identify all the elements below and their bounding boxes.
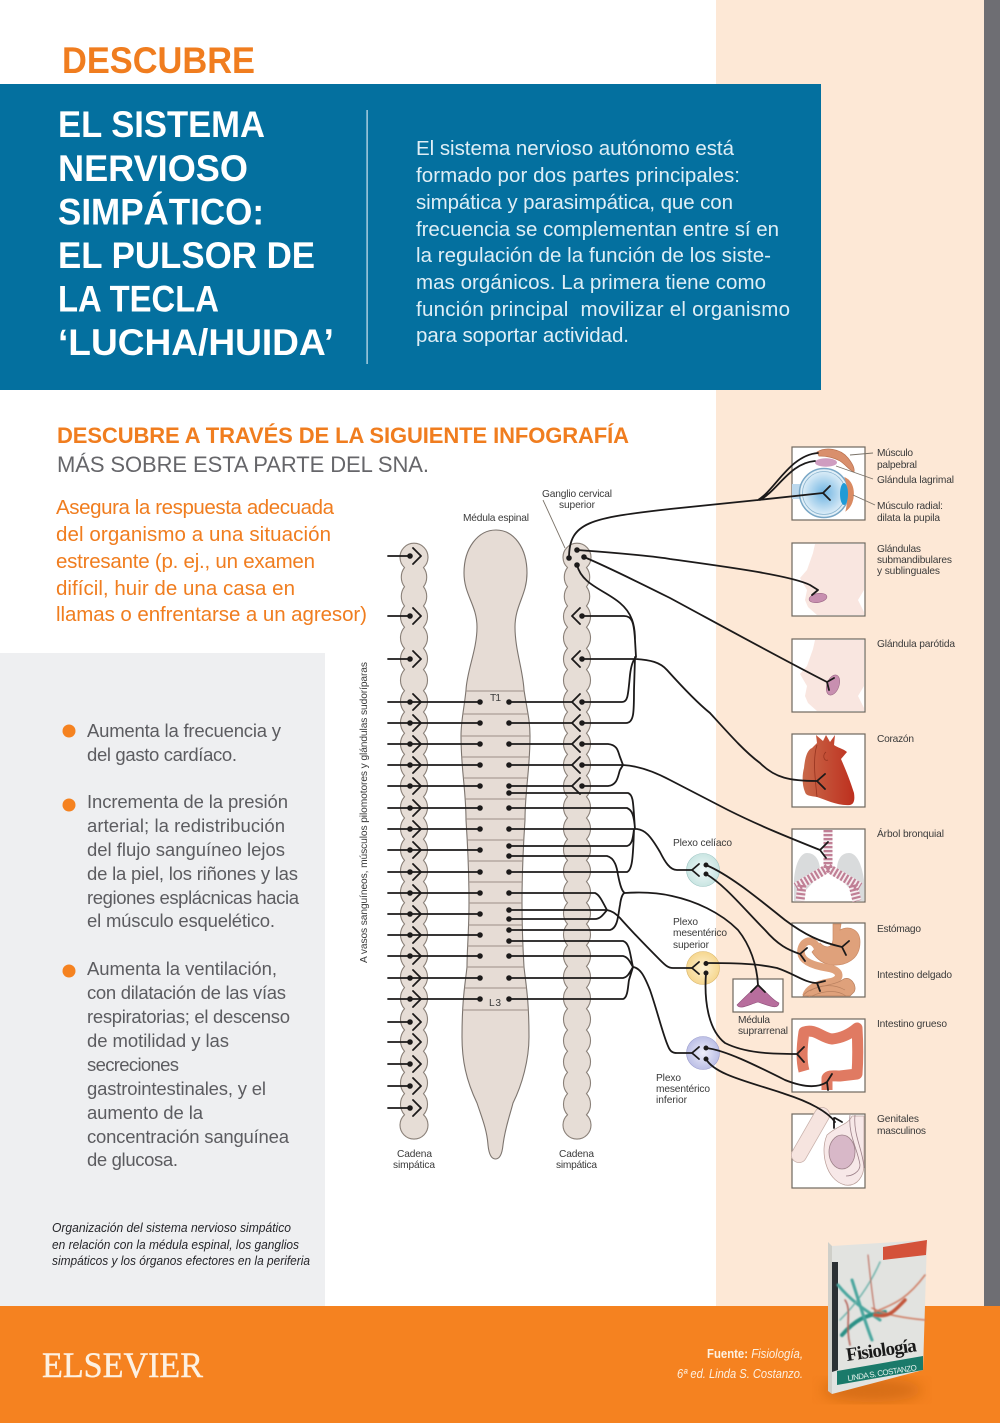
diagram labels: Plexo celíaco: [673, 838, 732, 849]
bullet: ventilation: de glucosa.: [87, 1149, 178, 1170]
diagram labels: superior: [673, 940, 710, 951]
diagram labels: Médula espinal: [463, 513, 529, 524]
submandibular: [577, 550, 818, 595]
diagram labels: Glándula parótida: [877, 639, 955, 650]
bullet: ventilation: de motilidad y las: [87, 1030, 229, 1051]
bullet: ventilation: aumento de la: [87, 1102, 204, 1123]
diagram labels: Cadena: [559, 1149, 594, 1160]
diagram labels: Músculo radial:: [877, 501, 943, 512]
source credit: Fuente: Fisiología,: [707, 1347, 803, 1361]
diagram labels: Médula: [738, 1015, 770, 1026]
caption: Organización del sistema nervioso simpático: [52, 1221, 291, 1235]
diagram labels: palpebral: [877, 460, 917, 471]
footer band: [0, 1306, 1000, 1423]
text block: orange intro: Asegura la respuesta adecuada: [56, 496, 335, 519]
bullet: ventilation: [62, 958, 290, 1170]
heart convergence: [577, 565, 825, 789]
diagram labels: Cadena: [397, 1149, 432, 1160]
text block: orange intro: del organismo a una situación: [56, 523, 331, 546]
small intestine: [706, 963, 825, 991]
parotid: [584, 557, 834, 690]
diagram labels: masculinos: [877, 1126, 926, 1137]
subheading: DESCUBRE A TRAVÉS DE LA SIGUIENTE INFOGRAFÍA: [57, 423, 629, 448]
diagram labels: [359, 448, 955, 1171]
sympathetic chain: left: [400, 543, 428, 1139]
diagram labels: Plexo: [673, 917, 698, 928]
icon: large intestine: [792, 1019, 865, 1092]
bullet: cardiac: del gasto cardíaco.: [87, 744, 237, 765]
diagram labels: Intestino delgado: [877, 970, 952, 981]
diagram labels: dilata la pupila: [877, 513, 940, 524]
diagram labels: y sublinguales: [877, 566, 940, 577]
text block: introduction: mas orgánicos. La primera tiene como: [416, 271, 766, 294]
panel: blue header: [0, 84, 821, 390]
text block: introduction: frecuencia se complementan entre sí en: [416, 218, 779, 241]
heading: main title: ‘LUCHA/HUIDA’: [58, 322, 334, 363]
bullet: ventilation: concentración sanguínea: [87, 1126, 290, 1147]
icon: stomach and small intestine: [792, 923, 865, 997]
text block: introduction: El sistema nervioso autónomo está: [416, 137, 735, 160]
icon: eye: [792, 447, 875, 520]
diagram labels: Glándula lagrimal: [877, 475, 954, 486]
superior mesenteric input: [509, 893, 692, 968]
bullet: pressure: el músculo esquelético.: [87, 910, 275, 931]
diagram labels: Músculo: [877, 448, 913, 459]
diagram labels: Árbol bronquial: [877, 827, 944, 840]
caption: [52, 1221, 310, 1268]
background: right grey bar: [984, 0, 1000, 1306]
diagram labels: L3: [489, 998, 501, 1009]
heading: main title: EL SISTEMA: [58, 104, 265, 145]
large intestine: [706, 973, 804, 1062]
plexus: celiac: [686, 854, 720, 886]
lung: [582, 744, 828, 858]
text block: introduction: para soportar actividad.: [416, 324, 629, 347]
nerve pathways: postganglionic to organs: [509, 453, 849, 1128]
icon: parotid gland: [792, 639, 865, 712]
bullet: pressure: de la piel, los riñones y las: [87, 863, 298, 884]
bullet: ventilation: secreciones: [87, 1054, 179, 1075]
diagram labels: Intestino grueso: [877, 1019, 947, 1030]
stomach: [706, 865, 849, 955]
genitals: [706, 1059, 842, 1128]
diagram labels: simpática: [556, 1160, 597, 1171]
duodenum: [706, 874, 807, 961]
heading: main title: SIMPÁTICO:: [58, 192, 264, 232]
diagram labels: Plexo: [656, 1073, 681, 1084]
bullet: cardiac: [62, 720, 282, 765]
eye: [569, 453, 830, 558]
text block: orange intro: llamas o enfrentarse a un agresor): [56, 603, 367, 626]
bullet: pressure: [62, 791, 300, 931]
nerve pathways: preganglionic rows: [388, 548, 584, 1116]
text block: introduction: [416, 137, 790, 347]
text block: orange intro: [56, 496, 367, 626]
diagram labels: T1: [490, 693, 501, 704]
bullet: ventilation: gastrointestinales, y el: [87, 1078, 266, 1099]
subheading: [57, 423, 629, 477]
diagram labels: mesentérico: [656, 1084, 710, 1095]
caption: simpáticos y los órganos efectores en la periferia: [52, 1254, 310, 1268]
diagram labels: Genitales: [877, 1114, 919, 1125]
icon: heart: [792, 734, 865, 807]
diagram labels: A vasos sanguíneos, músculos pilomotores y glándulas sudoríparas: [359, 662, 370, 963]
spinal cord: [460, 530, 531, 1160]
celiac input: [509, 793, 692, 872]
book cover: Fisiología: [845, 1335, 919, 1366]
book cover: [822, 1240, 927, 1402]
bullet: pressure: del flujo sanguíneo lejos: [87, 839, 285, 860]
sigmoid colon: [706, 1048, 832, 1090]
organ boxes: [733, 447, 875, 1188]
text block: introduction: formado por dos partes principales:: [416, 164, 740, 187]
diagram labels: Ganglio cervical: [542, 489, 612, 500]
text block: orange intro: estresante (p. ej., un examen: [56, 550, 315, 573]
icon: bronchial tree: [792, 829, 865, 902]
plexus: superior mesenteric: [686, 952, 720, 984]
inferior mesenteric input: [509, 941, 692, 1053]
logo: Elsevier: ELSEVIER: [42, 1345, 203, 1385]
diagram labels: superior: [559, 500, 596, 511]
heading: main title: LA TECLA: [58, 278, 219, 320]
bullet: cardiac: Aumenta la frecuencia y: [87, 720, 282, 741]
bullet: pressure: Incrementa de la presión: [87, 791, 288, 812]
heading: main title: NERVIOSO: [58, 148, 248, 189]
sympathetic chain: right: [563, 543, 591, 1139]
bullet: ventilation: Aumenta la ventilación,: [87, 958, 277, 979]
diagram labels: suprarrenal: [738, 1026, 788, 1037]
bullet: pressure: arterial; la redistribución: [87, 815, 285, 836]
diagram labels: submandibulares: [877, 555, 952, 566]
source credit: 6ª ed. Linda S. Costanzo.: [677, 1367, 803, 1381]
plexus: inferior mesenteric: [686, 1036, 720, 1070]
adrenal input: [509, 856, 765, 992]
subheading: MÁS SOBRE ESTA PARTE DEL SNA.: [57, 452, 429, 477]
diagram labels: Estómago: [877, 924, 921, 935]
diagram labels: mesentérico: [673, 928, 727, 939]
bullet: pressure: regiones esplácnicas hacia: [87, 887, 300, 908]
title label: DESCUBRE: DESCUBRE: [62, 40, 255, 81]
bullet: ventilation: con dilatación de las vías: [87, 982, 286, 1003]
text block: introduction: función principal movilizar el organismo: [416, 298, 790, 321]
diagram labels: Corazón: [877, 734, 914, 745]
text block: introduction: la regulación de la función de los siste-: [416, 244, 771, 267]
icon: male genitals: [792, 1114, 865, 1188]
icon: submandibular glands: [792, 543, 865, 616]
text block: orange intro: difícil, huir de una casa en: [56, 577, 295, 600]
icon: adrenal medulla: [733, 979, 783, 1012]
caption: en relación con la médula espinal, los ganglios: [52, 1238, 299, 1252]
diagram labels: inferior: [656, 1095, 688, 1106]
background: peach panel: [716, 0, 984, 1306]
heading: main title: EL PULSOR DE: [58, 235, 315, 276]
diagram labels: Glándulas: [877, 544, 921, 555]
diagram labels: simpática: [393, 1160, 435, 1171]
bullet: ventilation: respiratorias; el descenso: [87, 1006, 290, 1027]
book cover: LINDA S. COSTANZO: [847, 1363, 917, 1383]
heading: main title: [58, 104, 334, 363]
source credit: [677, 1347, 803, 1381]
panel: grey effects list: [0, 653, 325, 1306]
text block: introduction: simpática y parasimpática, que con: [416, 191, 733, 214]
